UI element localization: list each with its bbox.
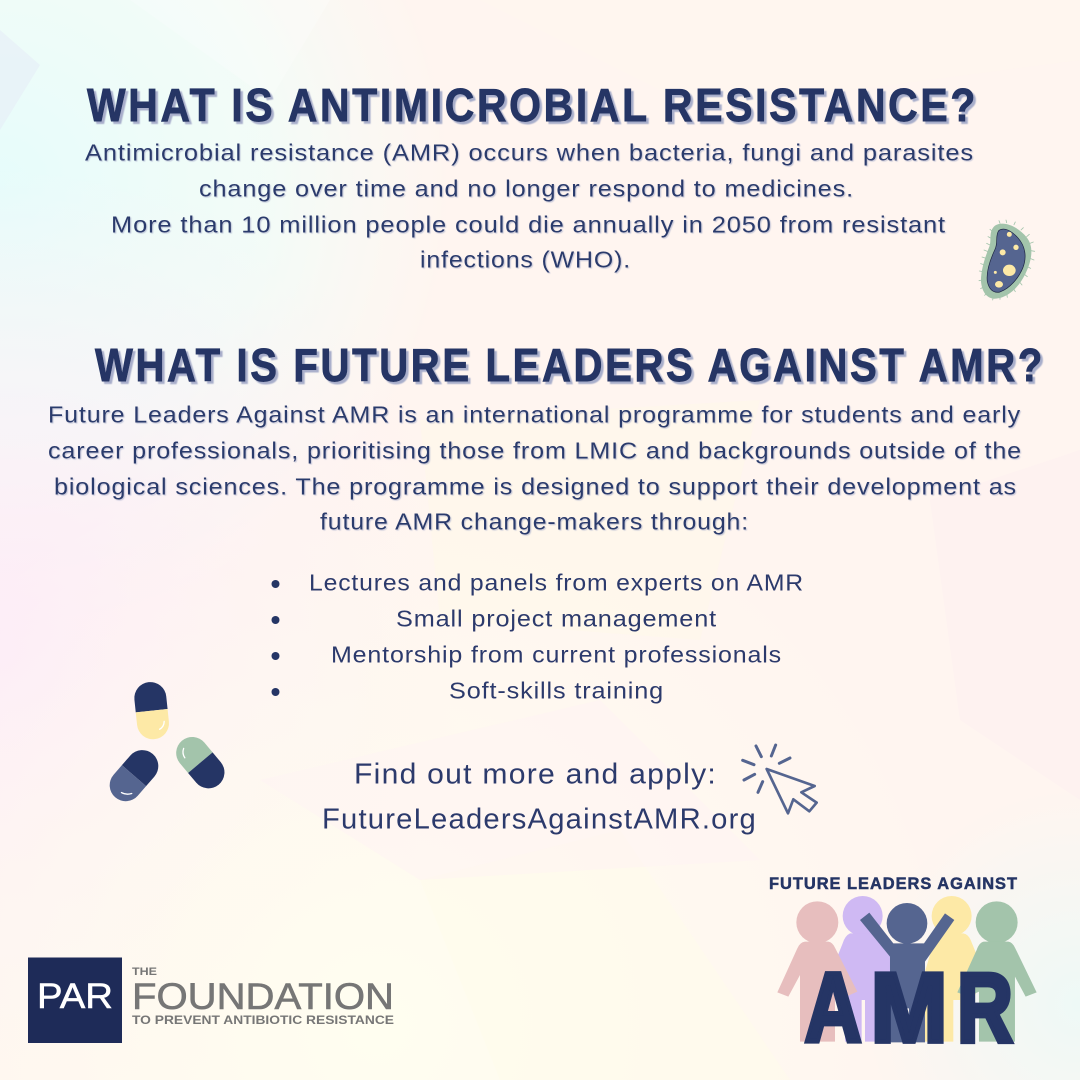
- logo: PAR Foundation: PAR: [37, 977, 113, 1016]
- text block: AMR definition: Antimicrobial resistance (AMR) occurs when bacteria, fungi and parasites: [85, 140, 974, 166]
- text block: AMR definition: More than 10 million people could die annually in 2050 from resistant: [111, 212, 946, 238]
- logo figures and AMR letters: M: [871, 953, 948, 1063]
- text block: programme description: Future Leaders Against AMR is an international programme for students and early: [48, 402, 1021, 428]
- logo figures and AMR letters: A: [805, 953, 862, 1063]
- bullet list: [272, 570, 804, 704]
- text block: programme description: biological sciences. The programme is designed to support their development as: [54, 474, 1017, 500]
- icon: capsules: [103, 680, 231, 808]
- icon: microbe: [979, 220, 1035, 300]
- call to action text: [322, 758, 757, 836]
- text block: AMR definition: change over time and no longer respond to medicines.: [199, 176, 854, 202]
- logo: Future Leaders Against AMR: [769, 874, 1037, 1063]
- logo figures and AMR letters: R: [957, 953, 1013, 1063]
- call to action text: FutureLeadersAgainstAMR.org: [322, 804, 757, 836]
- logo: PAR Foundation: TO PREVENT ANTIBIOTIC RESISTANCE: [132, 1015, 394, 1027]
- text block: AMR definition: [85, 140, 974, 272]
- bullet list: Small project management: [396, 606, 717, 632]
- text block: AMR definition: infections (WHO).: [420, 246, 631, 272]
- logo square: [28, 958, 122, 1043]
- bullet list: Lectures and panels from experts on AMR: [309, 570, 804, 596]
- bullet list: Mentorship from current professionals: [331, 642, 782, 668]
- text block: programme description: [48, 402, 1022, 534]
- heading: what is antimicrobial resistance: WHAT IS ANTIMICROBIAL RESISTANCE?: [87, 79, 978, 131]
- logo figures and AMR letters: [777, 896, 1037, 1063]
- logo: PAR Foundation: [28, 958, 394, 1043]
- text block: programme description: future AMR change-makers through:: [320, 508, 749, 534]
- logo: PAR Foundation: FOUNDATION: [132, 976, 394, 1017]
- logo: PAR Foundation: THE: [132, 966, 157, 978]
- icon: cursor click: [743, 745, 817, 813]
- text block: programme description: career professionals, prioritising those from LMIC and backgrounds outside of the: [48, 438, 1022, 464]
- call to action text: Find out more and apply:: [354, 758, 717, 790]
- bullet list: Soft-skills training: [449, 678, 664, 704]
- logo wordmark: future leaders against: FUTURE LEADERS AGAINST: [769, 874, 1018, 893]
